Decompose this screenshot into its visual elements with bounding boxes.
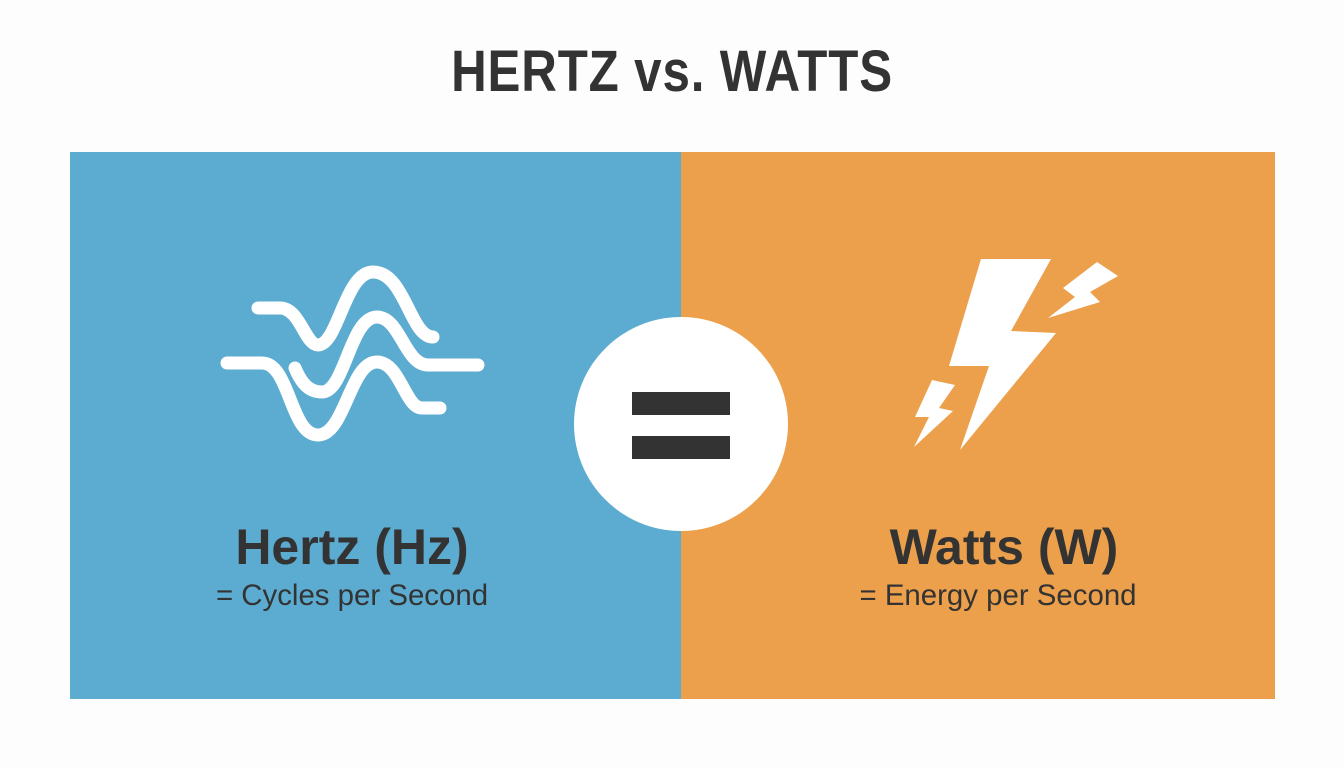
equals circle (574, 317, 788, 531)
heading: watts: Watts (W) (890, 519, 1118, 575)
title: HERTZ vs. WATTS (451, 39, 893, 104)
text: hertz definition: = Cycles per Second (216, 579, 488, 612)
icon: sine waves (227, 272, 478, 435)
icon: lightning bolts (914, 259, 1118, 450)
heading: hertz: Hertz (Hz) (235, 519, 469, 575)
panel: watts (681, 152, 1275, 699)
panel: hertz (70, 152, 681, 699)
text: watts definition: = Energy per Second (859, 579, 1137, 612)
